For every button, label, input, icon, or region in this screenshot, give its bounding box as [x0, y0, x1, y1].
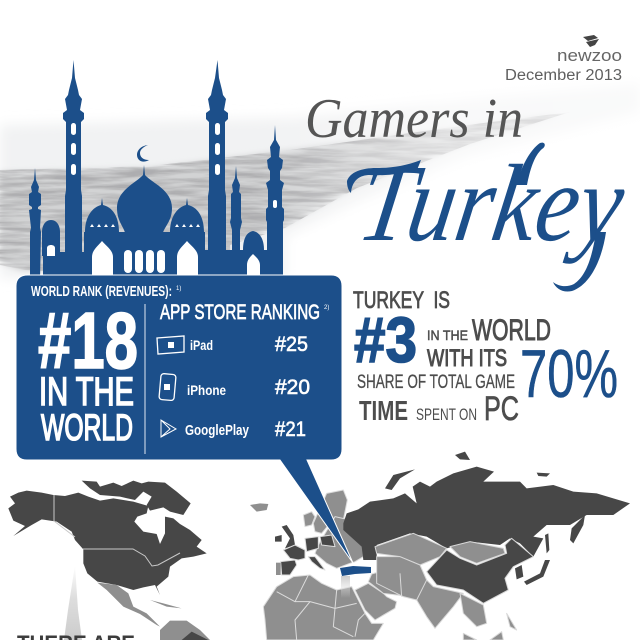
label: world rank: WORLD RANK (REVENUES):	[31, 284, 172, 300]
main hall block	[43, 232, 282, 280]
Arctic islands	[385, 452, 550, 490]
Near East	[368, 572, 410, 597]
logo: newzoo	[557, 35, 622, 65]
map: South America	[160, 621, 210, 640]
logo wordmark: newzoo	[557, 46, 622, 65]
with its: WITH ITS	[427, 345, 507, 372]
Africa borders	[277, 575, 365, 640]
Kazakhstan and Central Asia	[375, 533, 447, 565]
heading: app store ranking: APP STORE RANKING	[160, 301, 320, 324]
speech bubble: rankings	[16, 275, 353, 563]
Turkey k ascender	[516, 143, 545, 185]
value: iPhone: #20	[275, 376, 310, 399]
right small dome	[170, 198, 204, 232]
icon: Google Play	[161, 420, 176, 437]
bubble body and pointer	[16, 275, 353, 563]
Korea and Japan	[515, 533, 550, 585]
footnote 1: 1)	[176, 286, 181, 292]
in the: IN THE	[39, 370, 134, 414]
label: GooglePlay: GooglePlay	[185, 423, 249, 439]
icon: iPad	[157, 336, 184, 354]
map: North American borders	[54, 495, 180, 566]
value: iPad: #25	[275, 333, 308, 356]
faded streak below Turkey	[341, 576, 350, 598]
divider	[144, 304, 146, 454]
Portugal	[276, 563, 281, 575]
UK and Ireland	[275, 525, 295, 548]
Southeast Asia	[460, 593, 517, 640]
big rank number: #18	[38, 296, 138, 385]
map: Europe, Africa and Near East	[250, 490, 410, 640]
time: TIME	[359, 395, 408, 426]
icon: newzoo mark	[583, 35, 599, 47]
label: iPad: iPad	[190, 337, 213, 353]
turkey is: TURKEY IS	[353, 287, 450, 314]
Turkey y tail	[553, 232, 606, 292]
far-right small dome	[243, 231, 264, 250]
far-right minaret	[266, 125, 284, 280]
world map	[8, 452, 630, 640]
China	[427, 538, 533, 603]
Eastern Europe	[315, 517, 363, 568]
main dome	[117, 165, 172, 236]
Mongolia	[450, 542, 505, 563]
map: North America	[8, 481, 207, 595]
South Asia borders	[400, 573, 427, 600]
far-left minaret	[29, 168, 41, 280]
value: Google Play: #21	[275, 418, 306, 441]
South Asia	[377, 557, 463, 628]
footnote 2: 2)	[324, 305, 329, 311]
illustration: mosque silhouette	[29, 60, 284, 280]
number 3: #3	[354, 304, 417, 376]
left minaret	[63, 60, 84, 280]
world: WORLD	[472, 314, 551, 347]
arched windows	[47, 123, 277, 275]
decorative faded minaret	[64, 565, 82, 640]
right minaret	[206, 60, 228, 280]
text block: Turkey is #3 with 70% PC share	[353, 287, 618, 428]
France, Germany, Poland, Italy, Spain	[281, 535, 335, 575]
map: Central America and Caribbean	[97, 583, 210, 640]
centre-right small minaret	[230, 166, 242, 280]
far-left small dome	[42, 220, 60, 256]
pc: PC	[484, 390, 519, 428]
Canadian Arctic islands	[82, 481, 191, 515]
in the: IN THE	[427, 327, 468, 343]
Kamchatka and Sakhalin	[570, 515, 585, 543]
background: washed-out landscape	[0, 60, 640, 278]
Africa	[263, 575, 383, 640]
spent on: SPENT ON	[416, 405, 477, 424]
crescent	[137, 145, 149, 162]
title: Gamers in: Gamers in	[305, 88, 523, 150]
Iceland	[250, 503, 268, 512]
Arabia	[355, 583, 397, 620]
map: Russia and Asia	[343, 452, 630, 640]
map: Turkey highlight	[340, 566, 371, 576]
Turkey T swash	[347, 160, 421, 193]
label: iPhone: iPhone	[187, 382, 226, 398]
share of total game: SHARE OF TOTAL GAME	[357, 372, 515, 393]
Russia	[343, 467, 630, 560]
date: December 2013	[505, 67, 622, 84]
icon: iPhone	[159, 373, 176, 401]
Scandinavia	[303, 490, 347, 533]
world: WORLD	[41, 407, 133, 448]
left small dome	[85, 198, 119, 232]
